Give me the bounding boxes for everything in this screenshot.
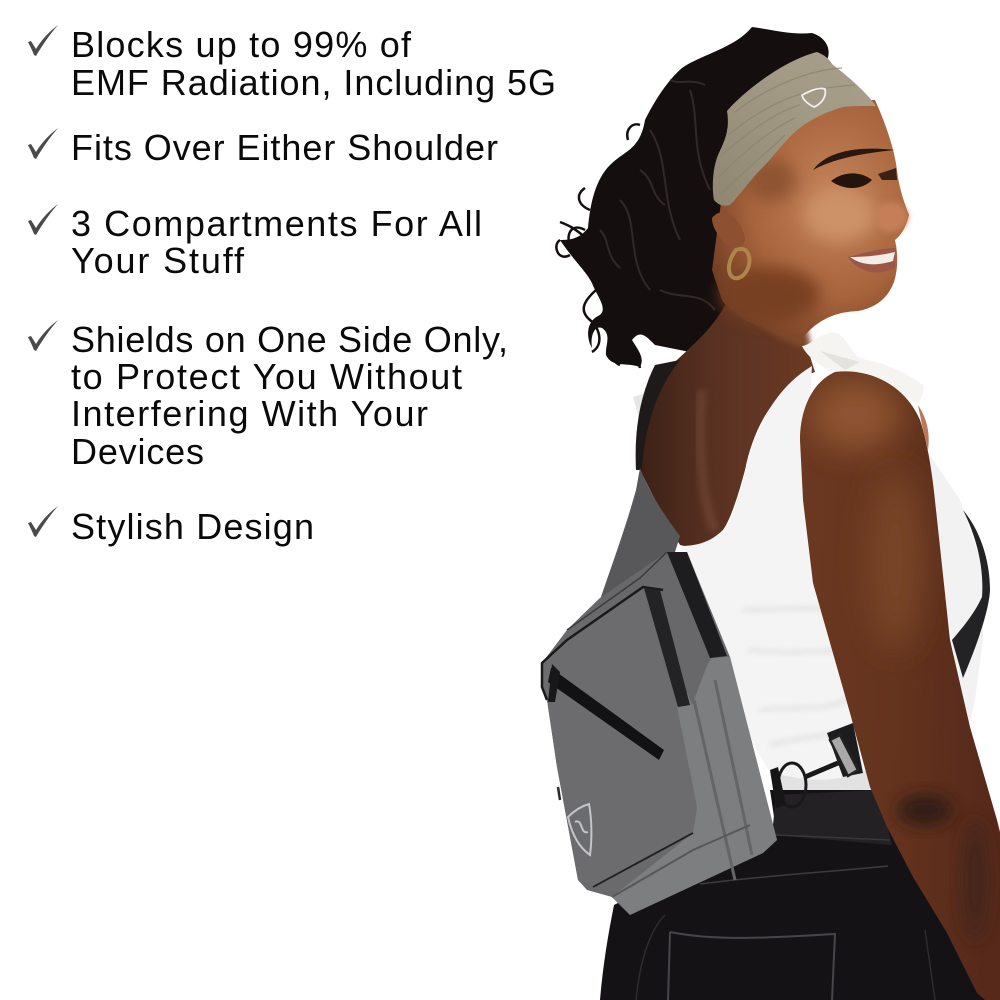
feature 1: Blocks up to 99% of — [71, 24, 412, 65]
ear — [712, 212, 745, 247]
feature 3: 3 Compartments For All — [71, 203, 482, 244]
feature list — [28, 24, 556, 547]
feature 4: Shields on One Side Only, — [71, 319, 508, 360]
bag logo — [568, 804, 591, 855]
feature 5: Stylish Design — [71, 506, 314, 547]
face — [712, 100, 909, 335]
feature 1 — [28, 24, 556, 103]
bag side panel — [612, 657, 777, 915]
tank top back — [680, 366, 880, 790]
sling bag — [542, 468, 777, 915]
earring — [729, 249, 750, 278]
tank top front — [925, 448, 984, 735]
feature 4: Devices — [71, 431, 204, 472]
feature 1: EMF Radiation, Including 5G — [71, 62, 556, 103]
far shoulder strap — [952, 510, 990, 678]
arm — [800, 371, 1000, 1000]
bag upper strap — [600, 468, 680, 600]
feature 4: to Protect You Without — [71, 356, 462, 397]
black jeans — [600, 788, 985, 1000]
headband — [713, 52, 876, 206]
strap clip hardware — [770, 723, 863, 808]
neck and back — [639, 300, 815, 546]
shoulder bow — [802, 333, 923, 404]
model photo illustration — [542, 27, 1000, 1000]
bag body — [542, 552, 777, 915]
eyebrow — [813, 149, 895, 170]
bag front panel — [542, 587, 697, 887]
black strap and white tank sliver — [633, 360, 680, 470]
headband logo — [802, 88, 825, 107]
feature 3 — [28, 203, 482, 281]
eye — [831, 173, 872, 188]
feature 3: Your Stuff — [71, 240, 245, 281]
feature 4: Interfering With Your — [71, 393, 428, 434]
main zipper panel — [667, 552, 727, 658]
zipper pull — [558, 787, 560, 800]
front zipper — [644, 588, 690, 707]
feature 4 — [28, 319, 508, 472]
feature 2: Fits Over Either Shoulder — [71, 127, 498, 168]
hair — [556, 27, 829, 368]
mouth — [848, 248, 896, 273]
bag top panel — [567, 552, 710, 705]
diagonal pocket zipper — [548, 668, 664, 760]
nose — [874, 202, 908, 232]
